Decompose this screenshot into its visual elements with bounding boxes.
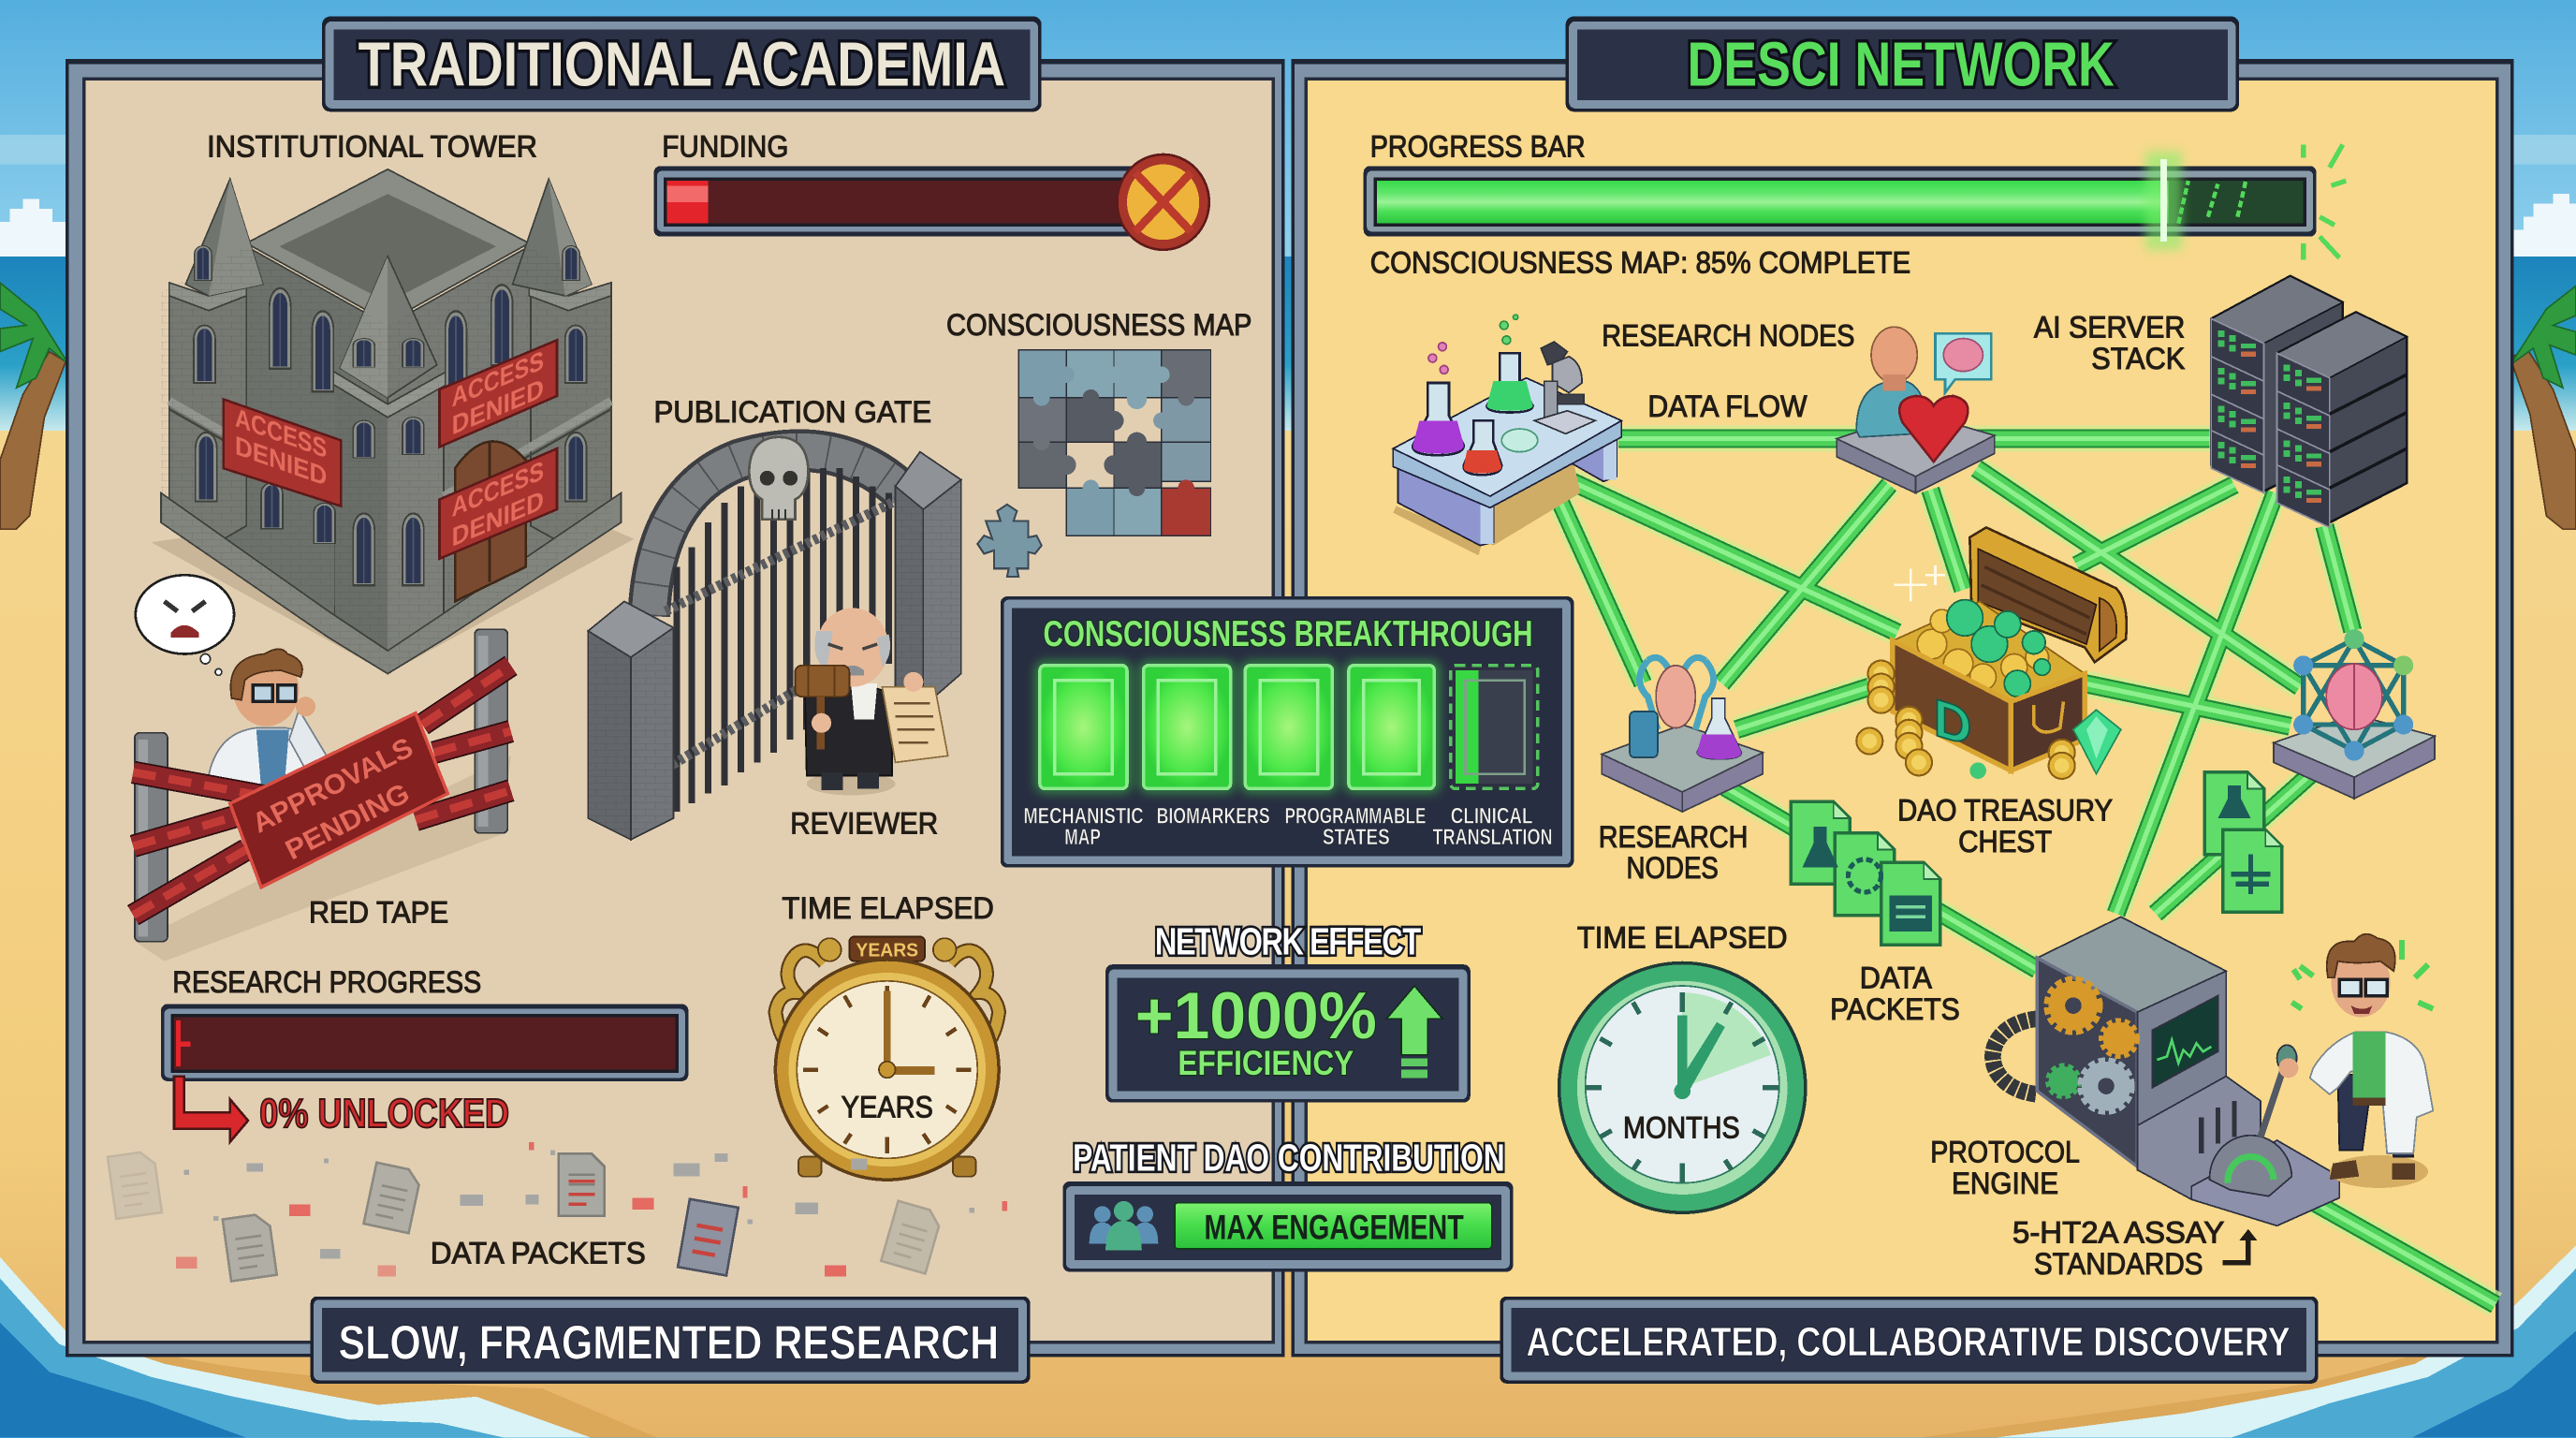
figure: happy scientist	[2278, 934, 2433, 1188]
button: max engagement	[1175, 1203, 1492, 1249]
heading: consciousness breakthrough: CONSCIOUSNESS BREAKTHROUGH	[1043, 614, 1533, 654]
sign: access denied upper right: ACCESS	[452, 345, 544, 414]
icon: brain speech bubble	[1936, 333, 1991, 392]
label: mechanistic map: MECHANISTIC	[1023, 804, 1144, 829]
panel: desci network	[1292, 17, 2513, 1357]
label: data packets desci	[1830, 961, 1960, 1026]
sign: access denied lower right: DENIED	[452, 485, 544, 553]
heading: patient dao contribution: PATIENT DAO CONTRIBUTION	[1073, 1137, 1505, 1179]
label: 5-ht2a assay standards	[2012, 1216, 2224, 1281]
panel: patient dao contribution	[1063, 1181, 1513, 1271]
sign: access denied lower right: ACCESS	[452, 455, 544, 523]
chest lid	[1969, 527, 2127, 662]
label: protocol engine: PROTOCOL	[1930, 1136, 2080, 1169]
label: ai server stack: STACK	[2091, 342, 2186, 375]
server stack back	[2211, 276, 2343, 493]
icon: sparks	[2304, 144, 2346, 259]
chest gold	[1893, 601, 2085, 701]
cell: complete fourth	[1344, 661, 1441, 794]
gem	[2073, 710, 2121, 774]
node: dao treasury chest	[1856, 527, 2127, 779]
stat: plus 1000 percent: +1000%	[1135, 978, 1377, 1052]
chest body	[1893, 640, 2011, 770]
icon: right palm tree	[2510, 286, 2576, 529]
gate right pillar	[896, 452, 961, 707]
label: dao treasury chest: DAO TREASURY	[1897, 794, 2113, 828]
label: programmable states	[1284, 804, 1426, 850]
icon: loose puzzle piece	[977, 505, 1042, 577]
label: funding: FUNDING	[662, 130, 788, 164]
server stack front	[2277, 312, 2407, 527]
clock text: YEARS	[842, 1090, 933, 1123]
label: time elapsed traditional: TIME ELAPSED	[782, 891, 994, 925]
sign: access denied left: ACCESS	[235, 404, 327, 464]
label: dao treasury chest: CHEST	[1958, 825, 2052, 858]
label: clinical translation: TRANSLATION	[1432, 826, 1553, 850]
heading: network effect: NETWORK EFFECT	[1155, 920, 1422, 963]
cell: biomarkers	[1138, 661, 1236, 794]
label: reviewer: REVIEWER	[790, 807, 938, 841]
label: data packets desci: PACKETS	[1830, 992, 1960, 1026]
label: red tape: RED TAPE	[309, 895, 448, 929]
label: data packets desci: DATA	[1860, 961, 1932, 995]
cell: mechanistic map	[1035, 661, 1132, 794]
icon: people group	[1090, 1201, 1158, 1251]
sign: access denied upper right	[439, 340, 557, 447]
node: laboratory table	[1393, 315, 1621, 555]
node: person with heart	[1837, 327, 1995, 493]
node: brain network	[2274, 629, 2435, 799]
data packets: fragmented	[108, 1142, 1007, 1282]
label: consciousness map: CONSCIOUSNESS MAP	[946, 308, 1251, 342]
sign: access denied lower right	[439, 448, 557, 559]
label: data flow: DATA FLOW	[1647, 389, 1808, 423]
icon: x coin	[1117, 154, 1209, 250]
label: time elapsed desci: TIME ELAPSED	[1577, 921, 1788, 955]
label: institutional tower: INSTITUTIONAL TOWER	[207, 130, 537, 164]
label: 5-ht2a assay standards: 5-HT2A ASSAY	[2012, 1216, 2224, 1250]
label: biomarkers: BIOMARKERS	[1157, 804, 1270, 829]
icon: up arrow	[1386, 986, 1442, 1078]
label: programmable states: PROGRAMMABLE	[1284, 804, 1426, 829]
bar: research progress	[161, 1004, 688, 1081]
label: efficiency: EFFICIENCY	[1178, 1044, 1354, 1082]
panel: consciousness breakthrough	[1001, 596, 1573, 868]
engine base and lever	[2191, 1140, 2339, 1225]
icon: publication gate	[588, 437, 961, 840]
label: research nodes lower	[1599, 820, 1748, 885]
label: research nodes lower: RESEARCH	[1599, 820, 1748, 854]
label: publication gate: PUBLICATION GATE	[654, 395, 931, 429]
node: ai server stack	[2211, 276, 2407, 527]
icon: skull	[749, 437, 809, 520]
footer tab: accelerated collaborative discovery	[1500, 1297, 2318, 1384]
label: ai server stack	[2034, 311, 2186, 375]
icon: angry thought bubble	[136, 575, 234, 675]
icon: left palm tree	[0, 283, 69, 529]
label: programmable states: STATES	[1323, 826, 1390, 850]
footer tab: slow fragmented research: SLOW, FRAGMENTED RESEARCH	[339, 1315, 999, 1369]
barrier: red tape	[133, 629, 511, 961]
gate left pillar	[588, 601, 674, 840]
title tab: traditional academia: TRADITIONAL ACADEMIA	[359, 30, 1005, 99]
clock: years	[775, 936, 999, 1180]
sign: access denied left: DENIED	[235, 431, 327, 492]
label: mechanistic map	[1023, 804, 1144, 850]
label: data packets traditional: DATA PACKETS	[431, 1237, 646, 1270]
label: ai server stack: AI SERVER	[2034, 311, 2185, 345]
icon: data packets stack	[1791, 801, 1940, 945]
title tab: desci network: DESCI NETWORK	[1687, 30, 2115, 99]
scroll	[882, 687, 948, 762]
bar: funding	[654, 154, 1209, 250]
cell: programmable states	[1240, 661, 1338, 794]
sign: approvals pending: APPROVALS	[247, 732, 418, 840]
clock tag: YEARS	[856, 940, 918, 961]
footer tab: accelerated collaborative discovery: ACCELERATED, COLLABORATIVE DISCOVERY	[1526, 1319, 2291, 1365]
node: protocol engine	[1993, 917, 2339, 1225]
sign: approvals pending: PENDING	[281, 777, 415, 866]
sign: access denied upper right: DENIED	[452, 373, 544, 441]
label: 85 percent complete: CONSCIOUSNESS MAP: 85% COMPLETE	[1370, 245, 1910, 279]
panel: traditional academia	[66, 17, 1284, 1357]
button: max engagement: MAX ENGAGEMENT	[1204, 1208, 1464, 1246]
label: protocol engine	[1930, 1136, 2080, 1200]
packet damaged	[678, 1199, 739, 1275]
label: clinical translation: CLINICAL	[1451, 804, 1533, 829]
icon: data packets right	[2204, 772, 2282, 912]
panel: network effect	[1105, 964, 1471, 1103]
clock text: MONTHS	[1623, 1110, 1740, 1144]
icon: excitement sparks	[2291, 940, 2433, 1009]
sign: access denied left	[224, 399, 341, 506]
title tab: traditional academia	[322, 17, 1042, 111]
label: protocol engine: ENGINE	[1952, 1167, 2058, 1200]
arrow: assay pointer	[2223, 1229, 2258, 1265]
red flask	[1464, 420, 1501, 475]
label: mechanistic map: MAP	[1064, 826, 1101, 850]
label: research nodes lower: NODES	[1627, 851, 1719, 885]
clock: months	[1558, 961, 1808, 1214]
microscope	[1534, 342, 1595, 433]
node: research bench left	[1602, 657, 1763, 812]
label: 0% unlocked: 0% UNLOCKED	[259, 1091, 509, 1137]
label: dao treasury chest	[1897, 794, 2113, 858]
figure: reviewer	[795, 608, 948, 795]
purple flask	[1412, 383, 1464, 455]
icon: institutional tower	[151, 169, 634, 674]
label: research progress: RESEARCH PROGRESS	[172, 965, 481, 999]
arrow: to unlocked	[174, 1077, 248, 1142]
footer tab: slow fragmented research	[311, 1297, 1030, 1384]
network: data flow lines	[1553, 439, 2496, 1305]
gears	[2049, 981, 2098, 1030]
puzzle: consciousness map	[977, 350, 1211, 577]
bar: consciousness map progress	[1364, 144, 2346, 259]
sign: approvals pending	[230, 713, 447, 888]
label: progress bar: PROGRESS BAR	[1370, 130, 1586, 164]
cell: clinical translation partial	[1451, 666, 1538, 788]
label: 5-ht2a assay standards: STANDARDS	[2034, 1247, 2203, 1281]
label: research nodes top: RESEARCH NODES	[1602, 318, 1855, 352]
label: clinical translation	[1432, 804, 1553, 850]
title tab: desci network	[1566, 17, 2239, 111]
node: dao treasury chest: D	[1934, 688, 1971, 758]
figure: stressed scientist	[207, 649, 332, 788]
packet with red marks	[559, 1153, 605, 1216]
green flask	[1486, 353, 1533, 413]
